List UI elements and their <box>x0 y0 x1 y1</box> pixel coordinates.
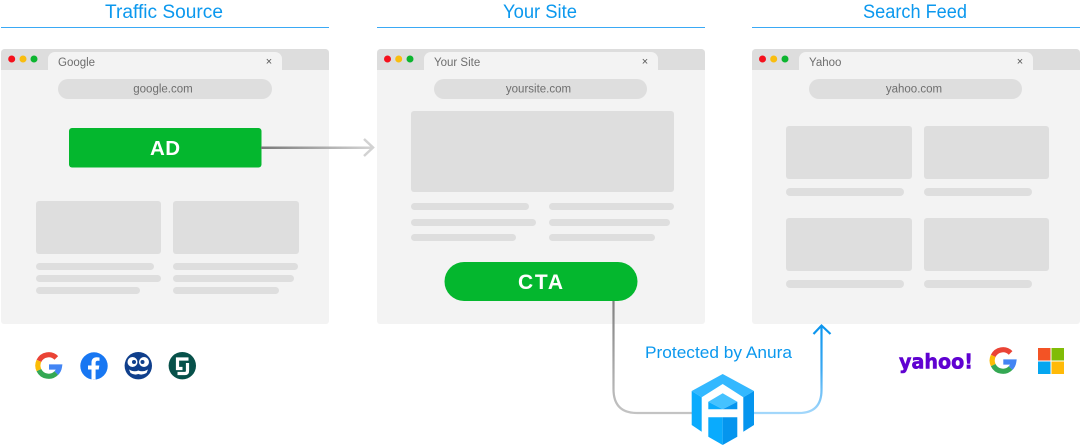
arrow: AD to Your Site <box>261 139 373 156</box>
icon: Microsoft <box>1038 348 1064 374</box>
icon: Google search <box>992 350 1014 371</box>
panel: Yahoo browser window: × <box>1017 56 1023 68</box>
result placeholders <box>786 126 1049 288</box>
AD button <box>69 128 262 168</box>
panel: Yahoo browser window <box>752 49 1080 324</box>
arrow: CTA to Anura shield <box>614 298 700 413</box>
panel: Your Site browser window <box>377 49 705 324</box>
panel: Your Site browser window: Your Site <box>434 57 480 69</box>
panel: Google browser window: google.com <box>133 84 193 96</box>
panel: Google browser window: × <box>266 56 272 68</box>
icon: Yahoo logo: yahoo! <box>899 350 973 374</box>
panel: Yahoo browser window: Yahoo <box>809 57 841 69</box>
ad placeholders <box>36 201 299 294</box>
icon: Google <box>38 355 59 376</box>
AD button: AD <box>150 137 180 160</box>
panel: Google browser window: Google <box>58 57 95 69</box>
panel: Google browser window <box>1 49 329 324</box>
heading: Your Site: Your Site <box>503 2 577 23</box>
icon: Green G logo <box>169 352 196 379</box>
icon: Owl mascot <box>125 352 152 379</box>
heading: Search Feed: Search Feed <box>863 2 967 23</box>
panel: Your Site browser window: yoursite.com <box>506 84 571 96</box>
content placeholders <box>411 111 674 241</box>
label: Protected by Anura: Protected by Anura <box>645 343 793 362</box>
icon: Anura shield logo <box>692 374 754 445</box>
heading: Traffic Source: Traffic Source <box>105 2 223 23</box>
icon: Facebook <box>80 352 108 380</box>
CTA button: CTA <box>518 271 563 294</box>
CTA button <box>444 262 638 301</box>
panel: Your Site browser window: × <box>642 56 648 68</box>
arrow: Anura shield to Search Feed <box>745 326 830 413</box>
panel: Yahoo browser window: yahoo.com <box>886 84 942 96</box>
